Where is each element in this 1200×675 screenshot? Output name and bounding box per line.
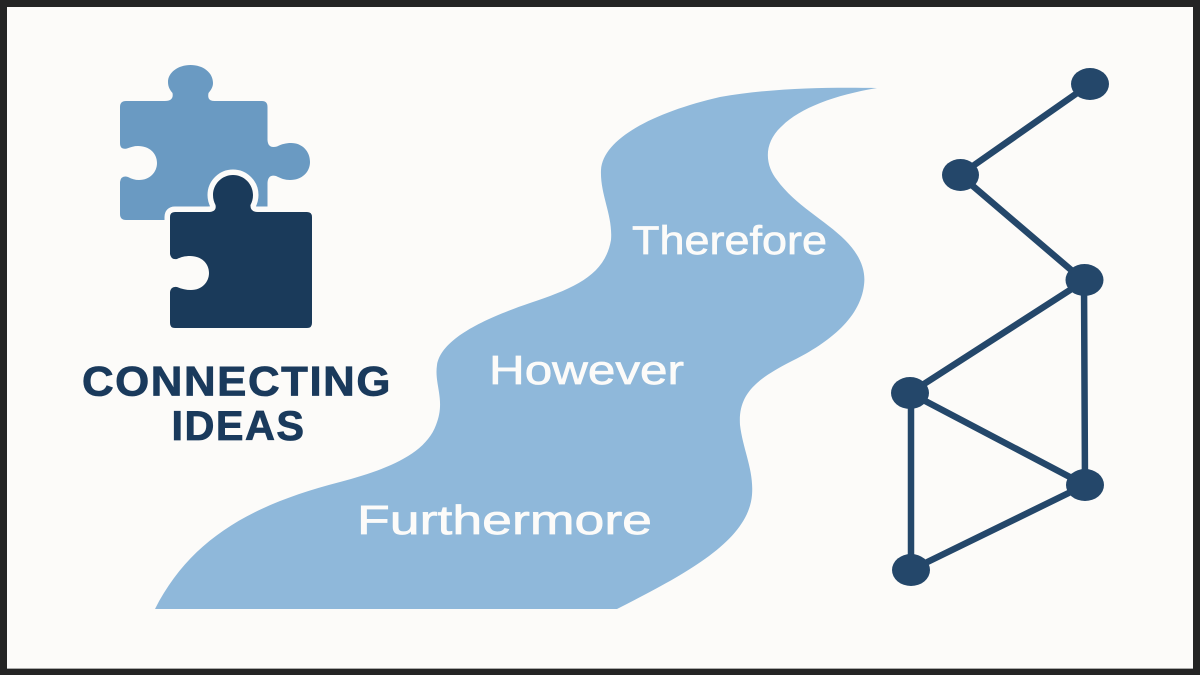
- icon: dark navy puzzle piece: [170, 175, 312, 328]
- network graph: [891, 68, 1109, 586]
- title: CONNECTING: [82, 358, 392, 404]
- title: [82, 358, 392, 449]
- river label: Furthermore: Furthermore: [357, 497, 652, 543]
- river shape: [155, 88, 877, 609]
- icon: light blue puzzle piece: [120, 65, 310, 220]
- river label: Therefore: Therefore: [632, 219, 827, 263]
- title: IDEAS: [172, 402, 306, 449]
- river label: However: However: [489, 347, 684, 393]
